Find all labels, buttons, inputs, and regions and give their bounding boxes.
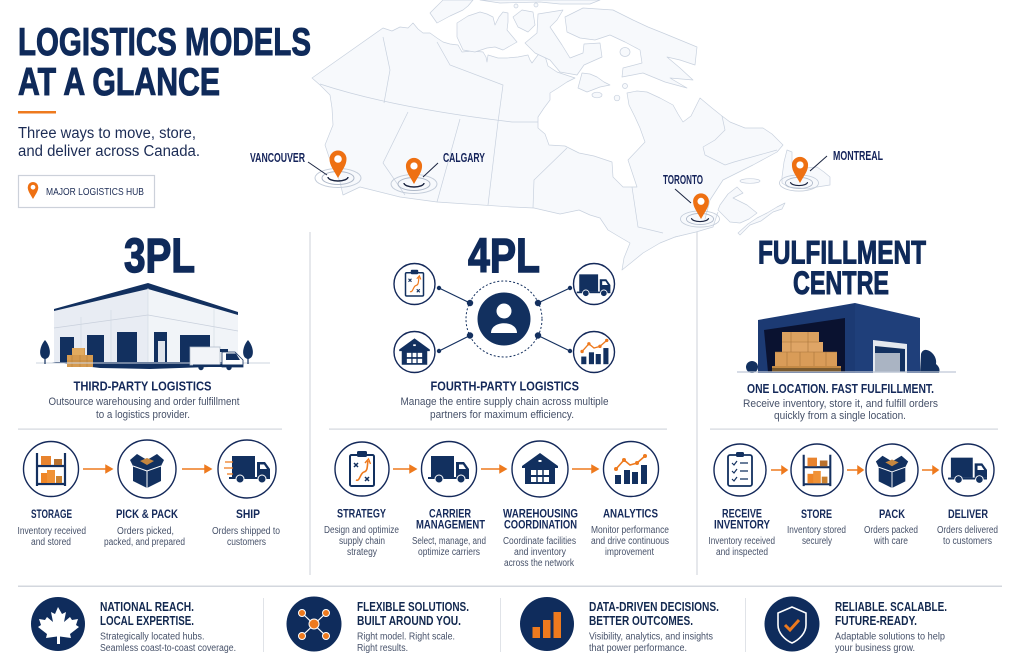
benefit: data-driven decisions: [520, 597, 719, 654]
step: ship: Orders shipped to: [212, 526, 280, 537]
step: carrier management: Select, manage, and: [412, 536, 486, 547]
hub: Vancouver: VANCOUVER: [250, 151, 305, 165]
benefit: data-driven decisions: Visibility, analytics, and insights: [589, 632, 713, 642]
benefit: reliable scalable: your business grow.: [835, 643, 915, 654]
panel: 4PL: [394, 230, 614, 421]
benefit: flexible solutions: FLEXIBLE SOLUTIONS.: [357, 600, 469, 614]
step: receive inventory: [708, 444, 775, 558]
benefit: reliable scalable: FUTURE-READY.: [835, 614, 917, 628]
step: analytics: and drive continuous: [591, 536, 669, 547]
description: quickly from a single location.: [774, 410, 906, 422]
step: analytics: improvement: [605, 547, 654, 558]
step: carrier management: MANAGEMENT: [416, 520, 485, 532]
step: strategy: supply chain: [339, 536, 385, 547]
benefit: flexible solutions: [286, 596, 469, 654]
subheading: ONE LOCATION. FAST FULFILLMENT.: [747, 381, 934, 396]
description: Receive inventory, store it, and fulfill orders: [743, 398, 939, 410]
step: storage: and stored: [31, 537, 71, 548]
step: strategy: [324, 442, 399, 558]
step: strategy: Design and optimize: [324, 525, 399, 536]
benefit: national reach: Strategically located hubs.: [100, 632, 204, 642]
benefit: data-driven decisions: BETTER OUTCOMES.: [589, 614, 693, 628]
arrow: [481, 466, 506, 472]
panel: 3PL: [36, 230, 270, 421]
rule: [710, 428, 998, 430]
legend: major logistics hub: MAJOR LOGISTICS HUB: [46, 187, 144, 198]
step: receive inventory: and inspected: [716, 547, 768, 558]
benefit: national reach: NATIONAL REACH.: [100, 600, 194, 614]
subheading: FOURTH-PARTY LOGISTICS: [430, 378, 579, 394]
subtitle: Three ways to move, store,: [18, 125, 196, 142]
step: storage: STORAGE: [31, 509, 72, 521]
footer rule: [18, 586, 1002, 587]
benefit: data-driven decisions: that power performance.: [589, 643, 687, 654]
step: warehousing coordination: across the network: [504, 558, 575, 569]
heading: fulfillment centre: [758, 234, 926, 301]
heading: 3PL: 3PL: [124, 230, 195, 283]
step: strategy: strategy: [347, 547, 377, 558]
diagram: hub and partners: [394, 264, 614, 372]
step: carrier management: [412, 442, 486, 558]
step: storage: Inventory received: [18, 526, 86, 537]
benefit: national reach: [31, 597, 236, 654]
step: ship: customers: [227, 537, 266, 548]
illustration: fulfillment building: [737, 303, 956, 373]
step: pick and pack: packed, and prepared: [104, 537, 185, 548]
heading: fulfillment centre: CENTRE: [793, 265, 889, 301]
arrow: [572, 466, 598, 472]
step: receive inventory: Inventory received: [708, 536, 775, 547]
step: deliver: [937, 444, 998, 547]
legend: major logistics hub: [18, 176, 154, 208]
illustration: warehouse with truck: [36, 283, 270, 370]
step: carrier management: CARRIER: [429, 508, 472, 520]
step: strategy: STRATEGY: [337, 508, 386, 520]
dividers: [310, 232, 697, 575]
step: deliver: DELIVER: [948, 509, 989, 521]
subtitle: and deliver across Canada.: [18, 143, 200, 160]
step: storage: [18, 442, 86, 548]
step: analytics: [591, 442, 669, 558]
description: [400, 396, 608, 421]
step: warehousing coordination: [503, 441, 578, 569]
step: pack: Orders packed: [864, 525, 918, 536]
step: pack: [864, 444, 918, 547]
hub: Toronto: TORONTO: [663, 173, 703, 187]
step: carrier management: optimize carriers: [418, 547, 480, 558]
step: warehousing coordination: Coordinate facilities: [503, 536, 576, 547]
rule: [329, 428, 667, 430]
description: Manage the entire supply chain across multiple: [400, 396, 608, 408]
step: warehousing coordination: and inventory: [514, 547, 566, 558]
step: ship: [212, 440, 280, 548]
benefit: data-driven decisions: DATA-DRIVEN DECISIONS.: [589, 600, 719, 614]
description: [743, 398, 939, 422]
footer dividers: [264, 598, 746, 652]
step: warehousing coordination: WAREHOUSING: [503, 508, 578, 520]
benefit: reliable scalable: Adaptable solutions to help: [835, 632, 945, 642]
panel: fulfillment centre: [737, 234, 956, 422]
title: [18, 21, 311, 104]
subheading: THIRD-PARTY LOGISTICS: [74, 378, 212, 394]
heading: fulfillment centre: FULFILLMENT: [758, 234, 926, 270]
step: receive inventory: RECEIVE: [722, 508, 762, 520]
title: AT A GLANCE: [18, 61, 220, 104]
arrow: [393, 466, 416, 472]
benefit: reliable scalable: [764, 596, 947, 654]
arrow: [182, 466, 211, 472]
benefit: flexible solutions: Right model. Right scale.: [357, 632, 455, 642]
map of Canada: [312, 0, 830, 270]
hub: Calgary: CALGARY: [443, 151, 485, 165]
description: Outsource warehousing and order fulfillment: [48, 396, 240, 408]
benefit: flexible solutions: BUILT AROUND YOU.: [357, 614, 461, 628]
step: pick and pack: PICK & PACK: [116, 509, 179, 521]
step: pack: PACK: [879, 509, 906, 521]
provincial borders: [320, 37, 777, 233]
step: pack: with care: [873, 536, 908, 547]
title: LOGISTICS MODELS: [18, 21, 311, 64]
step: ship: SHIP: [236, 509, 260, 521]
step: store: [787, 444, 846, 547]
rule: [18, 428, 282, 430]
step: store: Inventory stored: [787, 525, 846, 536]
step: deliver: to customers: [943, 536, 992, 547]
step: store: securely: [802, 536, 832, 547]
benefit: flexible solutions: Right results.: [357, 643, 408, 654]
hub: Calgary: [391, 151, 485, 194]
description: partners for maximum efficiency.: [430, 409, 574, 421]
arrow: [83, 466, 112, 472]
benefit: national reach: Seamless coast-to-coast coverage.: [100, 643, 236, 654]
hub: Vancouver: [250, 150, 361, 188]
benefit: national reach: LOCAL EXPERTISE.: [100, 614, 194, 628]
step: analytics: ANALYTICS: [603, 508, 658, 520]
arrow: [922, 466, 938, 474]
step: warehousing coordination: COORDINATION: [504, 520, 577, 532]
subtitle: [18, 125, 200, 160]
hub: Montreal: [779, 149, 883, 191]
arrow: [847, 466, 863, 474]
hub: Toronto: [663, 173, 720, 227]
description: to a logistics provider.: [96, 409, 190, 421]
accent rule: [18, 111, 56, 114]
heading: 4PL: 4PL: [468, 230, 540, 283]
hub: Montreal: MONTREAL: [833, 149, 883, 163]
arrow: [771, 466, 787, 474]
step: receive inventory: INVENTORY: [714, 520, 770, 532]
description: [48, 396, 240, 421]
step: analytics: Monitor performance: [591, 525, 669, 536]
benefit: reliable scalable: RELIABLE. SCALABLE.: [835, 600, 947, 614]
step: pick and pack: Orders picked,: [117, 526, 174, 537]
step: pick and pack: [104, 440, 185, 548]
step: deliver: Orders delivered: [937, 525, 998, 536]
step: store: STORE: [801, 509, 832, 521]
